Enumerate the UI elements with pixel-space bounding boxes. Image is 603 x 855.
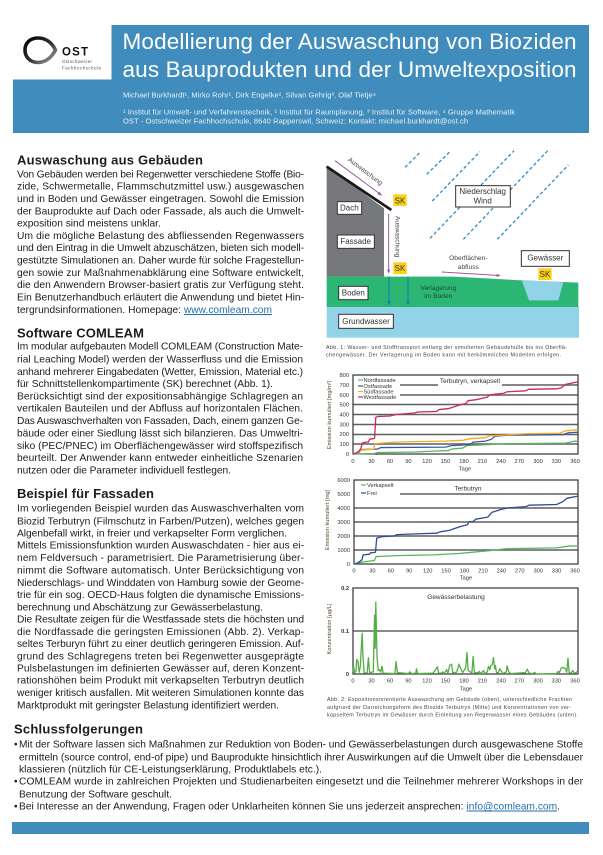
box: SK roof: SK	[395, 196, 406, 205]
legend	[358, 378, 396, 401]
panel: Beispiel für Fassaden	[16, 486, 304, 712]
y axis labels: 800	[340, 373, 349, 379]
x axis labels: 270	[515, 678, 524, 684]
chart title: Gewässerbelastung	[427, 594, 485, 601]
conclusions list: •	[14, 802, 18, 812]
conclusions list: COMLEAM wurde in zahlreichen Projekten und Studienarbeiten eingesetzt und die Teilnehmer mehrerer Workshops in der	[19, 776, 584, 788]
text block: grund des Schlagregens treten bei Regenwetter ausgeprägte	[17, 652, 304, 662]
legend: Nordfassade	[364, 378, 396, 384]
curves	[353, 382, 578, 454]
box: Gewässer: Gewässer	[527, 254, 564, 263]
caption: figure 1: chengewässer. Der Verlagerung im Boden kann mit herkömmlichen Modellen erfolgen.	[326, 352, 561, 358]
y axis title: Emission kumuliert [mg/m²]	[327, 380, 333, 449]
text block: seltes Terburyn führt zu einer deutlich geringeren Emission. Auf-	[17, 639, 304, 650]
box: Niederschlag Wind	[456, 186, 510, 207]
affiliations	[123, 108, 515, 126]
y axis labels: 5000	[337, 492, 350, 498]
curve	[353, 602, 578, 674]
y axis labels: 0.2	[341, 586, 349, 592]
text block: rial Leaching Model) werden der Wasserfluss und die Emission	[17, 354, 303, 366]
label: surface runoff: Oberflächen-	[449, 255, 488, 262]
label: soil transfer: Verlagerung	[420, 285, 457, 292]
text block: Biozid Terbutryn (Filmschutz in Farben/Putzen), welches gegen	[17, 516, 304, 528]
x axis labels: 330	[552, 459, 561, 465]
x axis title: Tage	[459, 466, 471, 472]
roof	[327, 167, 391, 210]
text block: und in Boden und Gewässer eingetragen. Sowohl die Emission	[17, 194, 304, 205]
x axis labels: 30	[369, 568, 376, 574]
caption: figure 2: Abb. 2: Expositionsorientierte Auswaschung am Gebäude (oben), unterschiedliche Frachten	[327, 697, 572, 703]
chart title: Terbutryn, verkapselt	[440, 378, 500, 385]
x axis labels: 60	[387, 678, 393, 684]
text block: gestützte Simulationen an. Daher wurde für solche Fragestellun-	[17, 256, 304, 266]
rain	[405, 151, 568, 239]
label: soil transfer: im Boden	[424, 293, 453, 300]
x axis labels: 360	[570, 459, 580, 465]
box: Fassade	[337, 235, 374, 248]
conclusions list: •	[14, 776, 18, 788]
y axis labels	[341, 586, 349, 678]
label: surface runoff: abfluss	[458, 264, 480, 271]
x axis labels: 90	[405, 459, 412, 465]
x axis title: Tage	[460, 686, 472, 692]
text block: Niederschlags- und Winddaten von Hamburg sowie der Geome-	[17, 578, 304, 589]
box: SK facade	[393, 262, 407, 274]
text block: berechnung und Abschätzung zur Gewässerbelastung.	[17, 602, 263, 614]
caption: figure 2: kapseltem Terbutryn im Gewässer durch Einleitung von Regenwasser eines Gebäudes (unten).	[327, 712, 578, 718]
text block: der Bauprodukte auf Dach oder Fassade, als auch die Umwelt-	[17, 206, 304, 218]
text block: Algenbefall wirkt, in freier und verkapselter Form verglichen.	[17, 528, 287, 540]
text block: exposition sind meistens unklar.	[17, 218, 161, 230]
logo: OST: Ostschweizer	[62, 59, 92, 64]
box: Niederschlag Wind: Niederschlag	[459, 187, 506, 196]
text block: bäude oder einer Siedlung lässt sich bilanzieren. Das Umweltri-	[17, 428, 303, 440]
heading: Software COMLEAM	[17, 326, 144, 340]
x axis labels: 210	[478, 459, 487, 465]
x axis labels: 300	[533, 459, 543, 465]
text block: vertikalen Bauteilen und der Abfluss auf horizontalen Flächen.	[17, 404, 303, 414]
x axis labels: 0	[351, 459, 355, 465]
box: Grundwasser	[339, 314, 393, 328]
authors: Michael Burkhardt¹, Mirko Rohr¹, Dirk Engelke², Silvan Gehrig³, Olaf Tietje⁴	[123, 90, 376, 100]
y axis labels: 1000	[337, 548, 350, 554]
y axis labels: 0	[346, 452, 349, 458]
label: Auswaschung facade: Auswaschung	[394, 216, 401, 258]
box: Boden	[339, 286, 368, 300]
line chart: Gewässerbelastung	[327, 586, 580, 692]
x axis labels: 270	[515, 459, 524, 465]
text block: Die Resultate zeigen für die Westfassade stets die höchsten und	[17, 614, 304, 626]
x axis labels: 180	[459, 678, 469, 684]
x axis labels: 120	[423, 568, 432, 574]
x axis title: Tage	[460, 576, 472, 582]
arrows: soil transfer	[387, 277, 410, 305]
x axis labels	[352, 568, 580, 574]
footer bar	[12, 822, 589, 834]
heading: Auswaschung aus Gebäuden	[17, 152, 203, 168]
label: Auswaschung roof: Auswaschung	[346, 157, 384, 187]
box: Gewässer	[521, 251, 569, 266]
caption: figure 1	[326, 345, 567, 358]
text block: Das Auswaschverhalten von Fassaden, Dach, einem ganzen Ge-	[17, 416, 303, 427]
legend	[361, 483, 394, 497]
box: SK facade: SK	[395, 264, 406, 273]
text block: die Nordfassade die geringsten Emissionen (Abb. 2). Verkap-	[17, 627, 304, 638]
y axis labels: 400	[340, 412, 349, 418]
gridline	[353, 630, 578, 632]
frame	[353, 588, 578, 674]
title	[122, 29, 576, 82]
text block: Um die mögliche Belastung des abfliessenden Regenwassers	[17, 231, 304, 242]
x axis labels: 60	[388, 568, 394, 574]
text block	[17, 342, 303, 476]
building	[327, 166, 384, 277]
x axis labels: 120	[422, 459, 432, 465]
text block: Marktprodukt mit geringster Belastung identifiziert werden.	[17, 700, 279, 712]
x axis labels: 90	[406, 568, 412, 574]
y axis labels: 3000	[337, 520, 350, 526]
legend: Verkapselt	[367, 483, 394, 489]
line chart: Terbutryn, verkapselt	[327, 373, 580, 472]
y axis labels: 0.1	[341, 629, 349, 635]
label: surface runoff	[449, 255, 488, 271]
text block: rationshöhen beim Produkt mit verkapselten Terbutryn deutlich	[17, 676, 304, 686]
conclusions list: Mit der Software lassen sich Maßnahmen zur Reduktion von Boden- und Gewässerbelastungen durch ausgewaschene Stoffe	[19, 740, 583, 750]
panel: Auswaschung aus Gebäuden	[17, 152, 304, 316]
x axis labels: 120	[422, 678, 432, 684]
text block: Im modular aufgebauten Modell COMLEAM (Construction Mate-	[17, 342, 303, 352]
y axis labels: 6000	[337, 478, 350, 484]
text block: zide, Schwermetalle, Flammschutzmittel usw.) ausgewaschen	[17, 182, 304, 192]
x axis labels: 0	[352, 568, 356, 574]
legend: Westfassade	[364, 395, 396, 401]
y axis labels: 700	[340, 383, 349, 389]
x axis labels: 60	[387, 459, 393, 465]
logo: OST: OST	[62, 46, 88, 58]
chart title	[438, 376, 502, 386]
box: Niederschlag Wind: Wind	[474, 197, 492, 206]
gridlines	[353, 385, 578, 444]
conclusions list: Bei Interesse an der Anwendung, Fragen oder Unklarheiten können Sie uns jederzeit ansprechen: info@comleam.com.	[19, 802, 560, 812]
x axis labels: 240	[496, 678, 506, 684]
caption: figure 2	[327, 697, 578, 718]
line chart: Terbutryn	[325, 478, 580, 582]
logo: OST	[25, 38, 101, 70]
x axis labels: 150	[441, 678, 450, 684]
text block: tergrundsinformationen. Homepage: www.comleam.com	[17, 305, 272, 316]
panel: Software COMLEAM	[17, 326, 303, 476]
text block	[17, 170, 304, 316]
x axis labels: 240	[496, 459, 506, 465]
x axis labels: 270	[515, 568, 525, 574]
conclusions list	[14, 740, 584, 812]
box: SK roof	[393, 194, 407, 206]
legend: Ostfassade	[364, 384, 392, 390]
legend: Frei	[367, 491, 377, 497]
text block: Mittels Emissionsfunktion wurden Auswaschdaten - hier aus ei-	[17, 540, 304, 552]
y axis labels	[337, 478, 350, 568]
x axis labels: 360	[570, 678, 580, 684]
x axis labels: 330	[552, 678, 561, 684]
box: SK water: SK	[540, 270, 551, 279]
caption: figure 1: Abb. 1: Wasser- und Stofftransport entlang der simulierten Gebäudehülle bis ins Oberflä-	[326, 345, 567, 351]
text block: trie für ein sog. OECD-Haus folgten die dynamische Emissions-	[17, 590, 304, 601]
x axis labels: 240	[497, 568, 506, 574]
x axis labels: 30	[368, 459, 375, 465]
pond	[522, 280, 563, 300]
frame	[353, 375, 578, 454]
x axis labels: 0	[351, 678, 355, 684]
conclusions list: klassieren (nützlich für CE-Leistungserklärung, Produktlabels etc.).	[19, 764, 322, 776]
text block: Ein Benutzerhandbuch erläutert die Anwendung und bietet Hin-	[17, 292, 304, 304]
x axis labels: 150	[441, 568, 451, 574]
chart title: Terbutryn	[454, 486, 482, 492]
ground	[327, 277, 578, 307]
text block: Im vorliegenden Beispiel wurden das Auswaschverhalten vom	[17, 504, 304, 514]
title: aus Bauprodukten und der Umweltexposition	[122, 57, 576, 82]
arrows: leaching and runoff	[335, 161, 501, 277]
curves	[354, 496, 578, 564]
text block: nimmt die Software automatisch. Unter Berücksichtigung von	[17, 566, 304, 576]
text block: Von Gebäuden werden bei Regenwetter verschiedene Stoffe (Bio-	[17, 170, 304, 180]
conclusions list: Benutzung der Software geschult.	[19, 790, 172, 800]
caption: figure 2: aufgrund der Darreichungsform des Biozids Terbutryn (Mitte) und Konzentrationen von ver-	[327, 705, 571, 711]
x axis labels: 180	[460, 568, 469, 574]
y axis labels	[340, 373, 349, 458]
y axis labels: 600	[340, 393, 349, 399]
x axis labels: 180	[459, 459, 469, 465]
box: Grundwasser: Grundwasser	[342, 317, 390, 326]
x axis labels: 210	[478, 678, 487, 684]
y axis title: Emission kumuliert [mg]	[325, 489, 331, 550]
x axis labels: 300	[533, 568, 543, 574]
text block: siko (PEC/PNEC) im Oberflächengewässer wird stoffspezifisch	[17, 441, 303, 452]
groundwater	[327, 307, 579, 338]
conclusions list: ermitteln (source control, end-of pipe) und Bauprodukte hinsichtlich ihrer Auswirkungen auf die Umwelt über die Lebensdauer	[19, 752, 584, 764]
y axis labels: 100	[340, 442, 349, 448]
text block: und den Eintrag in die Umwelt abzuschätzen, bieten sich modell-	[17, 243, 304, 254]
diagram: water and substance transport	[327, 151, 579, 338]
x axis labels	[351, 459, 580, 465]
y axis labels: 0	[346, 672, 349, 678]
y axis labels: 4000	[337, 506, 350, 512]
text block: beurteilt. Der Anwender kann entweder einheitliche Szenarien	[17, 453, 303, 464]
text block: gen sowie zur Maßnahmenabklärung eine Software entwickelt,	[17, 268, 304, 279]
header banner	[13, 25, 589, 133]
y axis labels: 2000	[337, 534, 350, 540]
text block: nutzen oder die Parameter individuell festlegen.	[17, 466, 231, 476]
box: Dach	[337, 202, 362, 214]
legend: Südfassade	[364, 390, 394, 396]
text block: Berücksichtigt sind der expositionsabhängige Schlagregen an	[17, 392, 303, 402]
affiliations: OST - Ostschweizer Fachhochschule, 8640 Rapperswil, Schweiz; Kontakt: michael.burkhardt@ost.ch	[123, 116, 468, 126]
text block: nem Feldversuch - parametrisiert. Die Parametrisierung über-	[17, 553, 304, 564]
text block: die den Anwendern Browser-basiert gratis zur Verfügung steht.	[17, 280, 304, 291]
text block	[16, 504, 304, 712]
heading: Schlussfolgerungen	[14, 722, 143, 736]
y axis labels: 200	[340, 432, 349, 438]
x axis labels: 210	[478, 568, 488, 574]
title: Modellierung der Auswaschung von Bioziden	[122, 29, 576, 54]
box: Fassade: Fassade	[340, 237, 372, 246]
panel: Schlussfolgerungen	[14, 722, 584, 812]
text block: anhand mehrerer Eingabedaten (Wetter, Emission, Material etc.)	[17, 367, 303, 378]
y axis labels: 500	[340, 402, 349, 408]
x axis labels: 150	[441, 459, 450, 465]
x axis labels: 360	[570, 568, 580, 574]
gridlines	[354, 494, 578, 550]
label: soil transfer	[420, 285, 457, 300]
x axis labels	[351, 678, 580, 684]
x axis labels: 30	[368, 678, 375, 684]
text block: weniger kritisch ausfallen. Mit weiteren Simulationen konnte das	[16, 688, 304, 699]
box: Boden: Boden	[342, 288, 365, 297]
y axis labels: 300	[340, 422, 349, 428]
text block: Pulsbelastungen im definierten Gewässer auf, deren Konzent-	[17, 664, 304, 674]
box: Dach: Dach	[340, 204, 359, 213]
conclusions list: •	[14, 740, 18, 750]
box: SK water	[538, 268, 552, 280]
logo: OST: Fachhochschule	[62, 66, 101, 70]
x axis labels: 300	[533, 678, 543, 684]
frame	[354, 480, 578, 564]
text block: für Schnittstellenkompartimente (SK) berechnet (Abb. 1).	[17, 379, 273, 390]
x axis labels: 90	[405, 678, 412, 684]
heading: Beispiel für Fassaden	[17, 486, 154, 501]
x axis labels: 330	[552, 568, 561, 574]
affiliations: ¹ Institut für Umwelt- und Verfahrenstechnik, ² Institut für Raumplanung, ³ Institut für Software, ⁴ Gruppe Mathematik	[123, 108, 515, 116]
y axis title: Konzentration [µg/L]	[327, 603, 333, 655]
y axis labels: 0	[347, 562, 350, 568]
